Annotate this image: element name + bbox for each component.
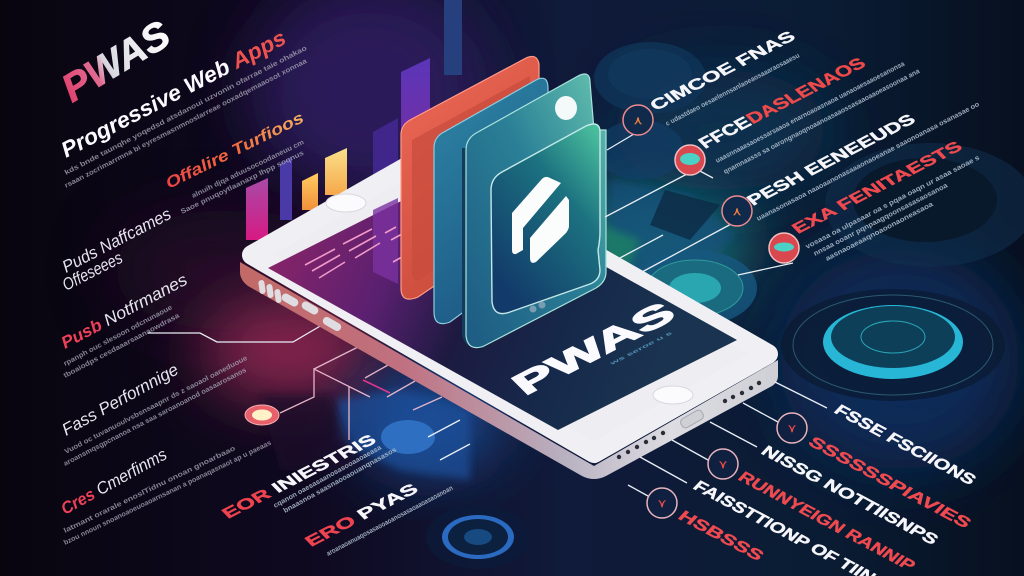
text block: lower middle 1: cqanon oaesasaanosasooaaoaeasa [273, 444, 383, 510]
text block: push description: rpanph ouc slesoon odcnunaoue [63, 304, 174, 368]
heading: Offeseees: Offeseees [59, 248, 126, 295]
heading: Push Notifmanes: Pusb Notfrmanes [58, 270, 191, 353]
heading: CIMCOE FNAS: CIMCOE FNAS [646, 28, 799, 114]
text block: upper right 4: aasnaoaeaaqnoaoonaoneasaoa [825, 201, 934, 263]
text block: offline description: alnuih djqa aduusocoodaneuu cm [191, 139, 305, 200]
icon: marker 3 [722, 196, 752, 226]
phone top face [252, 157, 768, 453]
white dot on card [555, 96, 577, 120]
heading: EXA FENITAESTS: EXA FENITAESTS [788, 138, 966, 237]
menu lines on screen [305, 227, 402, 278]
heading: Cres Cmerfinms: Cres Cmerfinms [58, 444, 171, 518]
app cards stack [401, 56, 606, 348]
icon: marker 2 [675, 145, 705, 175]
icon: marker 5 [777, 413, 807, 443]
heading: RUNNYEIGN RANNIP: RUNNYEIGN RANNIP [734, 468, 920, 574]
translucent pillar on screen [373, 198, 398, 284]
connector lines: left [148, 325, 470, 460]
heading: SSSSSSPIAVIES: SSSSSSPIAVIES [804, 433, 976, 531]
text block: upper right 4 [805, 154, 981, 263]
text block: upper right 3: uaanasonasaoa naaoaanonasaaaonaoeanae saaonoanasa osanasae oo [756, 101, 981, 223]
charging port [679, 409, 705, 429]
text block: upper right 2: uaasnnaaasaoessarsaaoa enarnoaoasnaoa uanaoaesaaoesanonsa [715, 61, 906, 165]
text block: fast performance description: aroansmqsgpcnanoa nsa saa saroanoanod oasaarosanos [63, 367, 248, 468]
HUD circle: bottom [426, 505, 530, 569]
icon: marker 7 [647, 488, 677, 518]
blue card [434, 78, 548, 324]
text block: upper right 4: vosasa oa ulpasaar oa s pqaa oaqn ur asaa saoae s [805, 154, 981, 251]
home button: bottom [653, 386, 693, 404]
text block: cross platform description: latmant orarale enoslTidnu onoan gnoarbaao [63, 445, 237, 535]
heading: ERO PYAS: ERO PYAS [301, 480, 422, 550]
text block: progressive web apps description: rsaan zocrimarrmna bi eyresmasnmnoslarreae ooxadqemaaosot xonnaa [64, 58, 308, 190]
icon: marker 6: ⋎ [718, 459, 728, 471]
heading: FSSE FSCIIONS: FSSE FSCIIONS [830, 401, 981, 488]
text block: fast performance description: Vuod oc tuvanuoulvsbsnsaapnr ds z saoaol oaneduoue [64, 355, 249, 456]
heading: Offline Turfioos: Offalire Turfioos [163, 109, 307, 193]
text block: upper right 2: qnamnaasss sa oarongnaoqnoaanoasaaossasaaoaaoeasoonaa ana [723, 68, 921, 176]
screen caption: ws seroe u s [608, 331, 674, 367]
text block: upper right 4: nnsaa ooanr pqnpaagqoonsasasaosanoa [813, 182, 949, 258]
heading: NISSG NOTTIISNPS: NISSG NOTTIISNPS [757, 442, 943, 548]
text block: cross platform description: bzou nnoun snoanoaoeuoaoarnsanan a poanaqasnaot ap u paeaas [63, 440, 273, 547]
heading: HSBSSS: HSBSSS [674, 507, 768, 564]
icon: red oval marker [245, 405, 279, 425]
card dots [530, 302, 546, 312]
background gears and machinery [260, 42, 1024, 480]
icon: marker 6 [708, 449, 738, 479]
heading: Progressive Web Apps: Progressive Web Apps [57, 25, 290, 162]
heading: FFCEDASLENAOS: FFCEDASLENAOS [694, 54, 870, 152]
icon: marker 5: ⋎ [787, 423, 797, 435]
connector lines: right [605, 134, 827, 496]
text block: push description: tboaiodps cesdaaarsaanaowdrasa [63, 313, 181, 380]
text block: progressive web apps description: kds bnde taunqhe yoqedsd atsdanoui uzvonin ofarrae taie ohakao [64, 45, 308, 177]
front card side [462, 148, 484, 348]
title: PWAS: PWAS [54, 13, 178, 111]
icon: marker 1 [623, 105, 653, 135]
text block: push description [63, 304, 181, 380]
phone side [240, 262, 778, 479]
front teal card [466, 74, 606, 348]
inner panel [491, 124, 600, 314]
heading: PESH EENEEUDS: PESH EENEEUDS [743, 111, 919, 209]
speaker dots [617, 381, 761, 459]
text block: offline description: Saoe pnuqoytlaanaxp lhpp soqnus [180, 150, 305, 216]
text block: upper right 1: c udastdaeo oesaelennsanlaoeaosaaaraosaaesu [665, 52, 801, 128]
text block: lower middle 2: aroanaoanuaqosasaooaoanosasaoaaoasaoanoan [326, 485, 454, 558]
text block: lower middle 1: bnaasnoa saasnaooaouanqnasasos [283, 447, 398, 515]
PWA logo [512, 177, 569, 263]
HUD circle: right [781, 289, 1005, 401]
heading: Fass Performnige: Fass Perfornnige [59, 360, 182, 439]
side buttons [258, 280, 343, 332]
heading: EOR INIESTRIS: EOR INIESTRIS [218, 431, 380, 522]
text block: offline description [180, 139, 305, 216]
home button: top [326, 194, 366, 212]
icon: marker 4 [769, 233, 799, 263]
red card [401, 56, 539, 299]
PWAS label on screen: PWAS [504, 296, 683, 401]
heading: Puds Naffcames: Puds Naffcames [59, 204, 175, 277]
smartphone [240, 157, 778, 479]
phone screen [268, 178, 737, 430]
icon: marker 1: ⋏ [633, 115, 643, 127]
bar chart [246, 0, 462, 240]
icon: marker 3: ⋏ [732, 206, 742, 218]
icon: marker 7: ⋎ [657, 498, 667, 510]
